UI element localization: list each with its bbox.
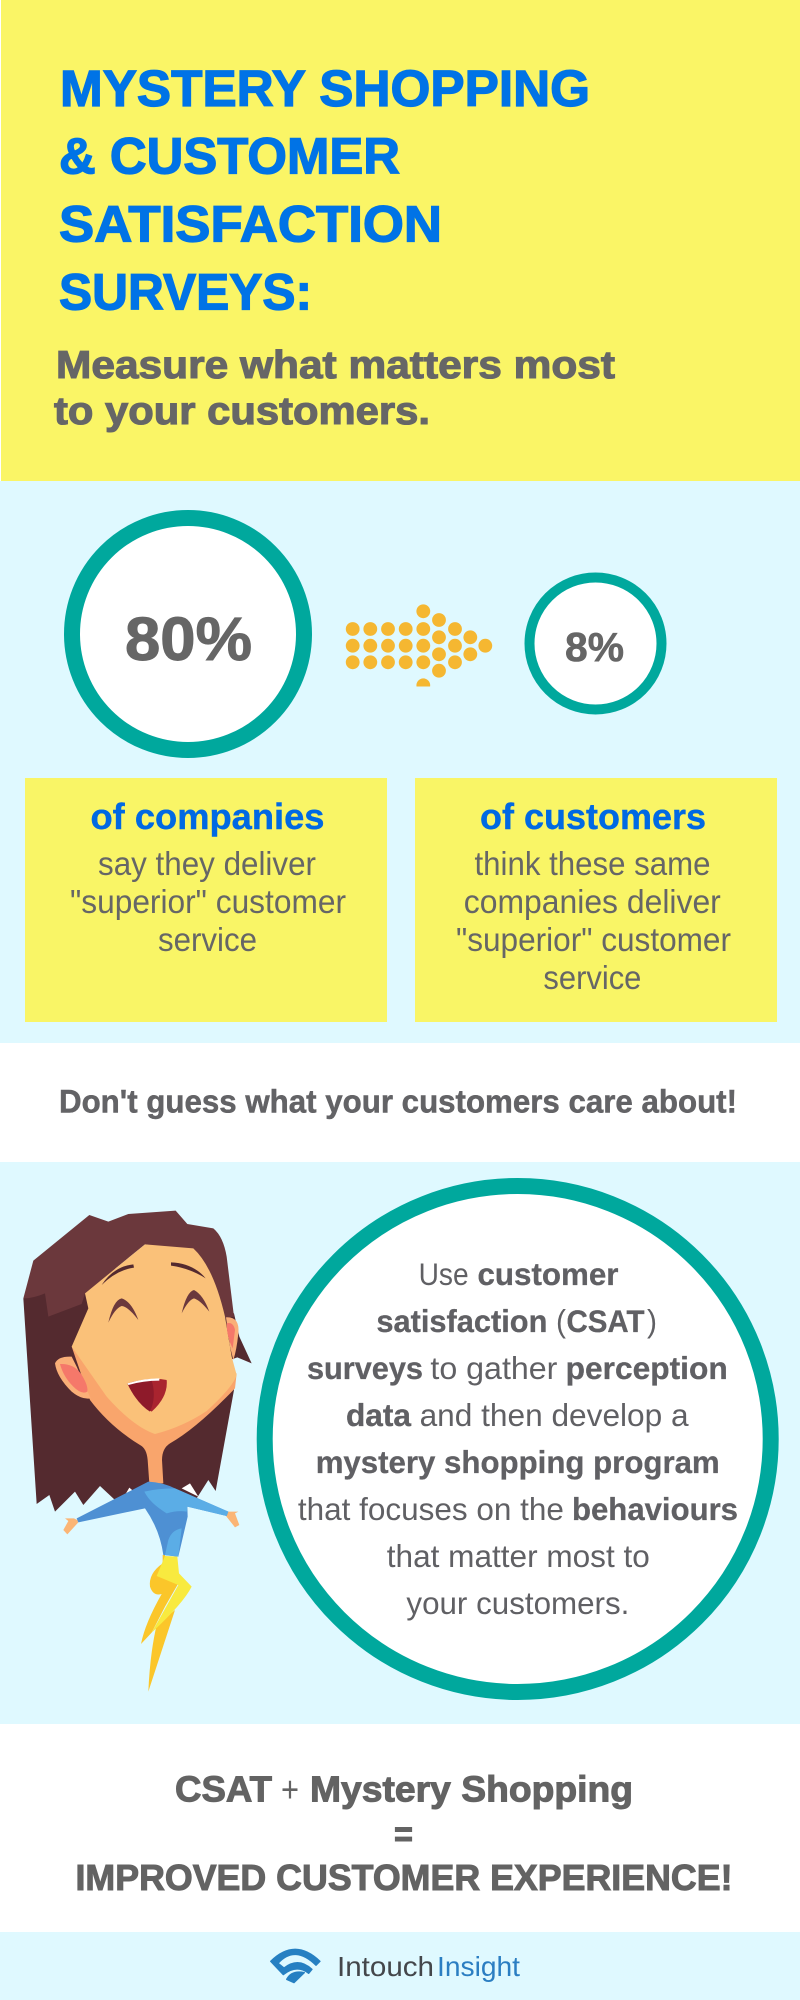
- panel: conclusion: Mystery Shopping: [310, 1769, 633, 1810]
- panel: conclusion: IMPROVED CUSTOMER EXPERIENCE!: [76, 1857, 732, 1898]
- subtitle: to your customers.: [54, 390, 430, 433]
- panel: header: [1, 0, 800, 481]
- panel: conclusion: [0, 1724, 800, 1932]
- advice circle: perception: [566, 1350, 728, 1386]
- callout: of customers: "superior" customer: [456, 921, 731, 958]
- title: SATISFACTION: [59, 196, 442, 253]
- advice circle: (: [556, 1303, 566, 1339]
- advice circle: customer: [478, 1256, 618, 1292]
- advice circle: behaviours: [572, 1491, 738, 1527]
- callout: of customers: [415, 778, 777, 1022]
- logo wordmark: [337, 1951, 520, 1982]
- subtitle: Measure what matters most: [56, 344, 615, 387]
- callout: of companies: service: [158, 921, 257, 958]
- callout: of companies: [25, 778, 387, 1022]
- callout: of companies: say they deliver: [98, 845, 316, 882]
- logo wordmark: Intouch: [337, 1951, 434, 1982]
- logo wordmark: Insight: [437, 1951, 520, 1982]
- advice circle: your customers.: [406, 1585, 629, 1621]
- title: & CUSTOMER: [59, 128, 400, 185]
- advice circle: ): [647, 1303, 657, 1339]
- advice circle: and then develop a: [420, 1397, 689, 1433]
- advice circle: data: [346, 1397, 411, 1433]
- panel: character and advice: [0, 1162, 800, 1724]
- panel: conclusion: +: [281, 1769, 299, 1810]
- illustration: cheering woman: [23, 1211, 252, 1692]
- callout: of companies: of companies: [90, 796, 324, 837]
- subtitle: [54, 344, 615, 433]
- advice circle: mystery shopping program: [316, 1444, 720, 1480]
- callout: of customers: think these same: [474, 845, 710, 882]
- callout: of companies: "superior" customer: [70, 883, 346, 920]
- title: MYSTERY SHOPPING: [60, 60, 590, 117]
- advice circle: CSAT: [566, 1303, 644, 1339]
- stat circle: 80%: 80%: [125, 605, 252, 673]
- callout: of customers: of customers: [480, 796, 706, 837]
- icon: wifi logo: [271, 1949, 320, 1983]
- advice circle: [265, 1186, 771, 1692]
- heading: don't guess banner: Don't guess what your customers care about!: [59, 1084, 737, 1120]
- advice circle: that focuses on the: [298, 1491, 564, 1527]
- advice circle: Use: [419, 1256, 469, 1292]
- panel: conclusion: CSAT: [175, 1769, 272, 1810]
- panel: statistics: [0, 481, 800, 1043]
- advice circle: satisfaction: [376, 1303, 547, 1339]
- heading: don't guess banner: [0, 1043, 800, 1162]
- panel: footer: [0, 1932, 800, 2000]
- icon: dotted arrow: [346, 604, 492, 686]
- stat circle: 8%: [530, 578, 662, 710]
- advice circle: surveys: [307, 1350, 423, 1386]
- panel: conclusion: =: [394, 1813, 413, 1854]
- title: [59, 60, 590, 321]
- stat circle: 8%: 8%: [565, 624, 624, 670]
- callout: of customers: service: [543, 959, 641, 996]
- title: SURVEYS:: [59, 264, 312, 321]
- advice circle: that matter most to: [387, 1538, 650, 1574]
- callout: of customers: companies deliver: [464, 883, 721, 920]
- stat circle: 80%: [72, 518, 304, 750]
- advice circle: to gather: [430, 1350, 557, 1386]
